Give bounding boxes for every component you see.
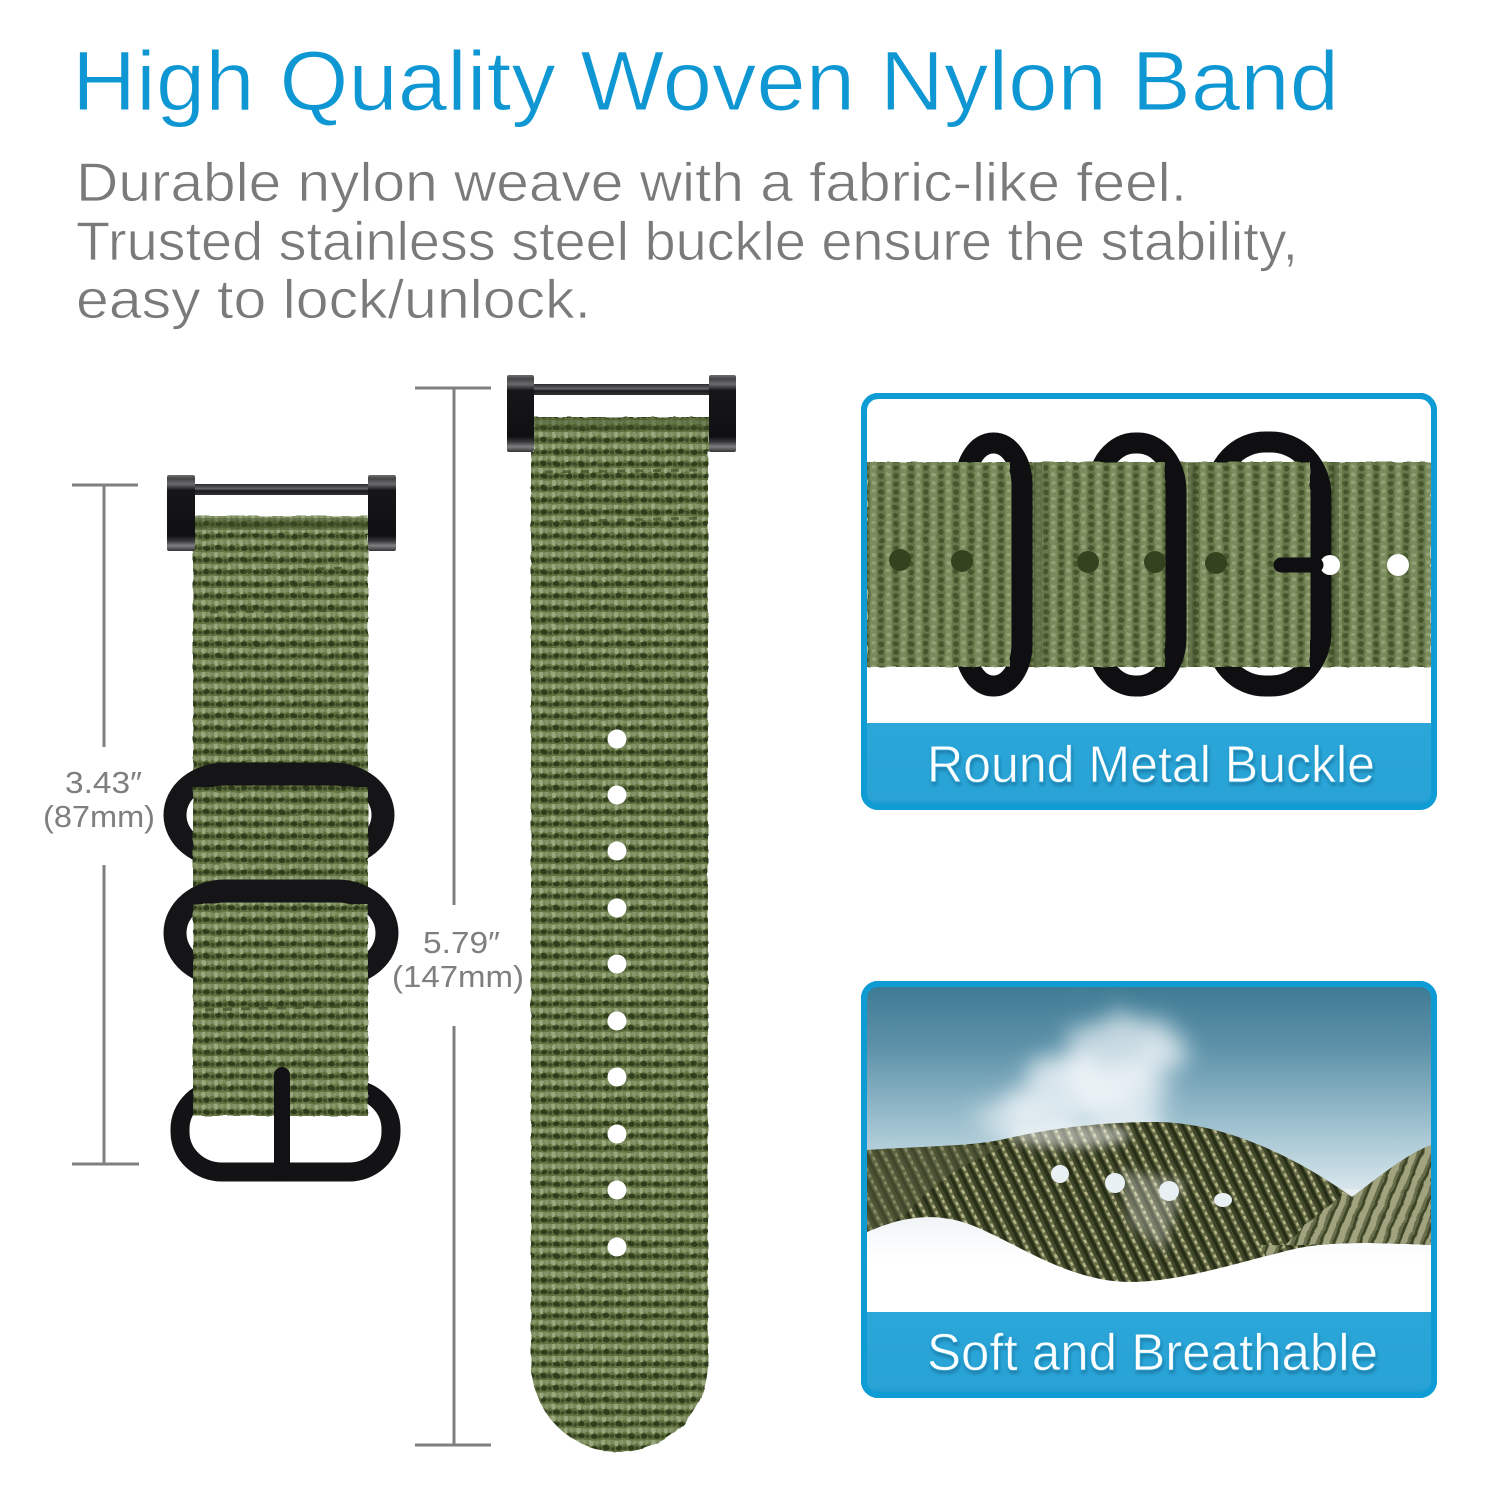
dimension: short strap length: 3.43″	[65, 765, 142, 800]
white strap holes	[1320, 554, 1409, 576]
ring one: short strap	[175, 774, 383, 856]
buckle ring: short strap	[180, 1089, 391, 1172]
short strap with rings and buckle	[167, 475, 396, 1177]
dimension: long strap length: (147mm)	[392, 959, 524, 994]
long strap with holes	[507, 375, 736, 1452]
woven band	[867, 1122, 1431, 1282]
dimension: long strap length	[392, 388, 524, 1445]
caption: soft and breathable: Soft and Breathable	[927, 1324, 1378, 1382]
buckle pin close-up	[1281, 558, 1316, 572]
dimension: short strap length: (87mm)	[43, 799, 155, 834]
strap fabric: short	[193, 516, 368, 1116]
spring bar: long strap	[530, 384, 712, 395]
strap holes	[608, 730, 626, 1256]
buckle pin: short strap	[274, 1067, 290, 1177]
spring bar: short strap	[190, 484, 372, 495]
panel: soft and breathable	[860, 984, 1440, 1395]
description text: Durable nylon weave with a fabric-like feel.	[76, 151, 1187, 213]
lug right: long strap	[709, 375, 736, 452]
band holes	[1051, 1165, 1232, 1207]
lug left: short strap	[167, 475, 195, 551]
strap close-up	[1009, 462, 1431, 668]
description text	[76, 151, 1298, 330]
dark strap holes	[889, 549, 1227, 574]
panel: round metal buckle	[864, 396, 1434, 807]
sky background	[864, 984, 1434, 1189]
caption: round metal buckle: Round Metal Buckle	[927, 736, 1375, 794]
caption bar: soft and breathable	[864, 1312, 1434, 1395]
dimension: short strap length	[43, 485, 155, 1164]
strap fabric: long	[531, 417, 709, 1452]
description text: Trusted stainless steel buckle ensure the stability,	[76, 210, 1298, 272]
description text: easy to lock/unlock.	[76, 268, 591, 330]
steam cloud	[987, 1007, 1180, 1146]
mist over band	[1010, 1122, 1185, 1250]
ring close-up three	[1215, 442, 1321, 686]
title: High Quality Woven Nylon Band	[72, 34, 1339, 128]
ring close-up two	[1097, 443, 1176, 686]
caption bar: round metal buckle	[864, 723, 1434, 807]
lug right: short strap	[368, 475, 396, 551]
ring close-up one	[965, 443, 1022, 686]
ring two: short strap	[175, 891, 387, 975]
dimension: long strap length: 5.79″	[423, 925, 500, 960]
lug left: long strap	[507, 375, 534, 452]
